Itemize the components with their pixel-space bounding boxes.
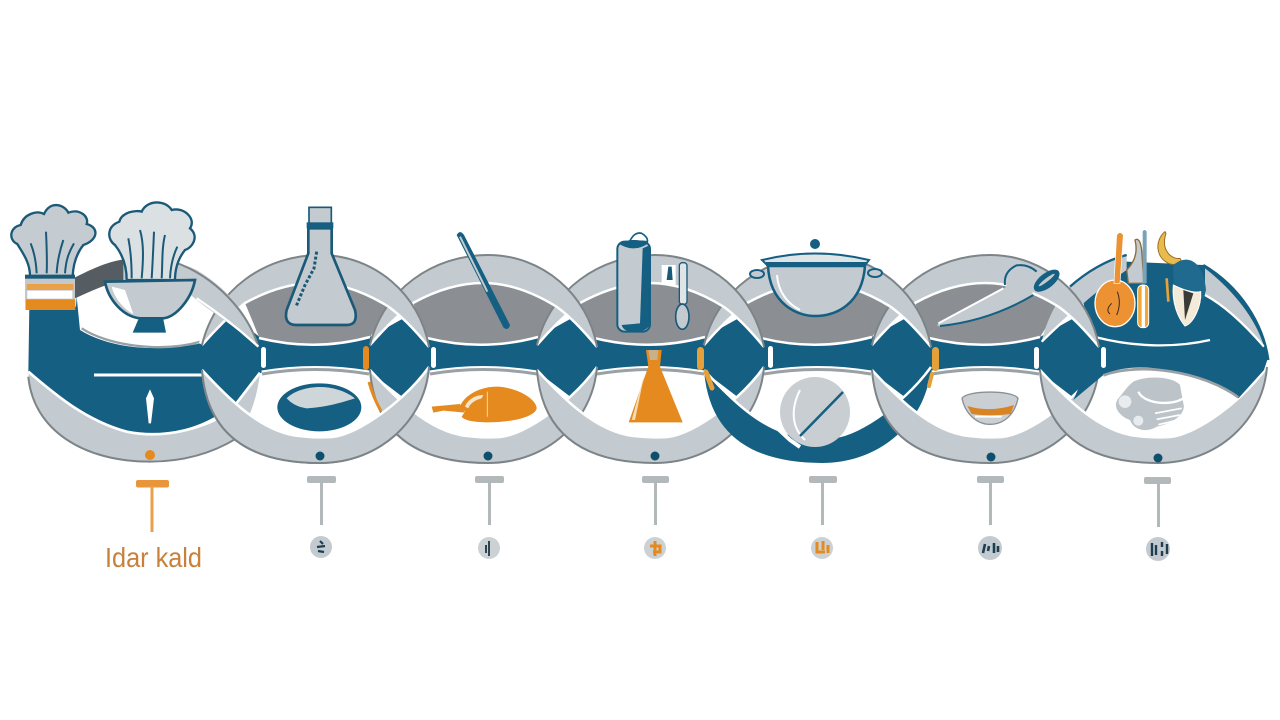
step dots [145, 450, 1162, 462]
icon: kitchen knife and ladle [937, 265, 1063, 327]
icon: chef hat with orange band [11, 205, 95, 310]
spire mark [146, 389, 154, 423]
icon: orange cone [629, 350, 683, 422]
icon: orange utensil group [1095, 230, 1206, 328]
connector ticks [261, 346, 1106, 411]
chain bases: blue band and lenses [235, 283, 1242, 436]
icon: cooking pot [750, 239, 882, 316]
icon: roast chicken [432, 387, 537, 422]
icon: soup bowl [962, 392, 1018, 424]
icon: plate with blade [760, 377, 850, 447]
step badges [310, 536, 1170, 561]
white divider line [94, 370, 202, 379]
lower-ring crescent overlap for second ring [202, 367, 429, 463]
label stem 1: orange [136, 480, 169, 532]
heading label: Idar kald [105, 542, 202, 573]
panel: last ring upper body [1042, 255, 1268, 423]
label stems: grey [307, 476, 1171, 527]
icon: flask [286, 207, 356, 325]
icon: tall canister and spoon [617, 233, 689, 332]
icon: bread loaf [277, 383, 361, 431]
lower rings [202, 367, 1267, 463]
icon: knife [457, 232, 510, 329]
upper rings [202, 255, 1099, 347]
icon: steaming bowl [105, 202, 195, 333]
icon: grey food pile [1116, 378, 1184, 430]
panel: first large ring [28, 259, 260, 462]
first ring upper crescent [123, 259, 258, 347]
